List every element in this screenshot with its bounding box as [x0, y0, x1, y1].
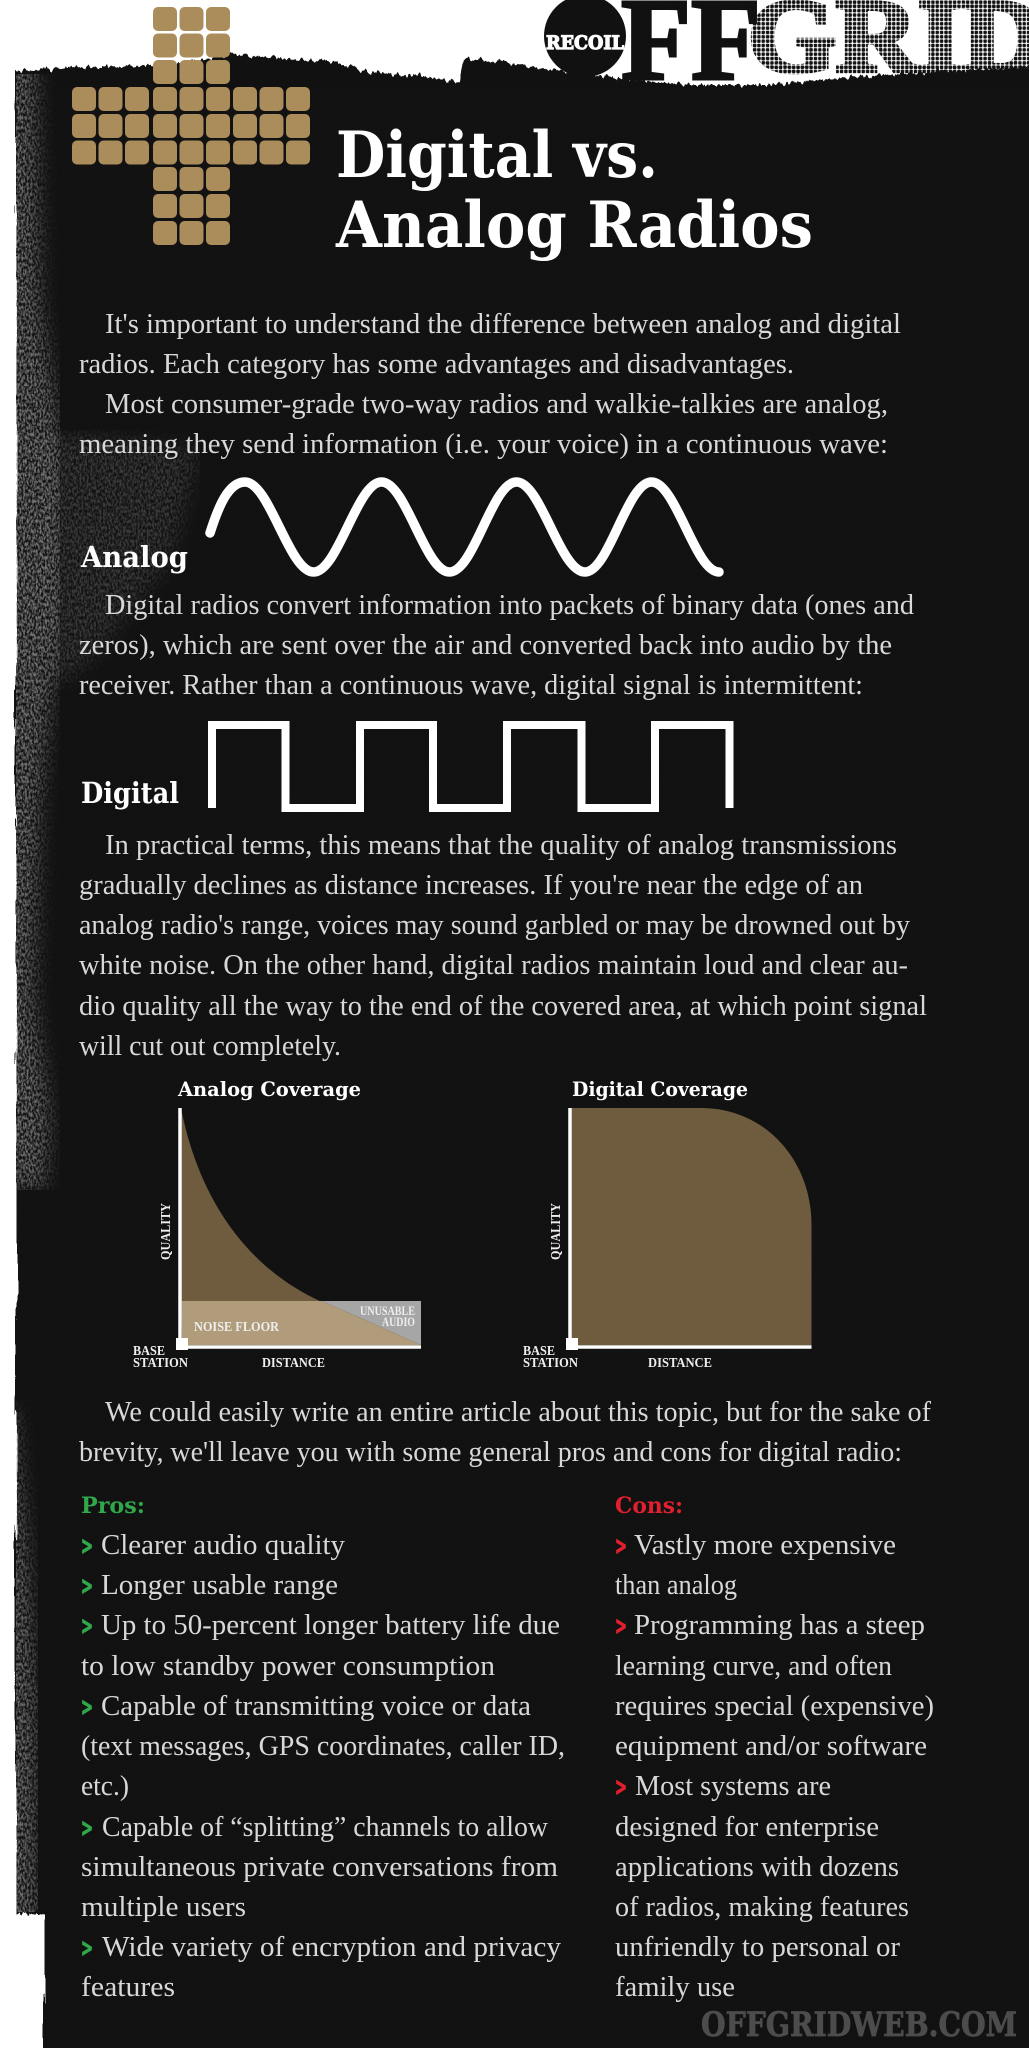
text block: practical terms: white noise. On the other hand, digital radios maintain loud and clear au-: [79, 950, 908, 981]
list text: [615, 1530, 934, 2003]
chart: digital square wave: [212, 725, 730, 808]
bullets: >: [81, 1692, 93, 1721]
list text: etc.): [81, 1771, 129, 1802]
text block: digital explanation: zeros), which are sent over the air and converted back into audio by the: [79, 630, 892, 661]
base station label: STATION: [133, 1356, 188, 1371]
logo circle with Recoil wordmark: RECOIL: [546, 32, 624, 54]
unusable audio label: AUDIO: [382, 1314, 415, 1329]
label: Analog: Analog: [80, 540, 188, 574]
title: Analog Radios: [335, 188, 813, 263]
list text: equipment and/or software: [615, 1731, 927, 1762]
bullets: >: [615, 1611, 627, 1640]
title: [335, 118, 813, 263]
unusable audio label: [360, 1303, 415, 1329]
icon: gold plus made of rounded tiles: [72, 7, 310, 245]
list text: Up to 50-percent longer battery life due: [101, 1610, 560, 1641]
text block: digital explanation: [79, 590, 914, 701]
text block: practical terms: gradually declines as distance increases. If you're near the edge of an: [79, 870, 863, 901]
unusable audio region: [322, 1301, 421, 1345]
text block: introduction: Most consumer-grade two-way radios and walkie-talkies are analog,: [105, 389, 888, 420]
grunge: faint patch behind analog section: [40, 430, 200, 690]
label: Digital: Digital: [81, 776, 179, 810]
text block: introduction: It's important to understand the difference between analog and digital: [105, 309, 901, 340]
title: Digital vs.: [336, 118, 658, 193]
base station marker: [566, 1338, 578, 1350]
unusable audio label: UNUSABLE: [360, 1303, 415, 1318]
logo: Recoil OffGrid masthead: [544, 0, 1029, 105]
bullets: >: [615, 1772, 627, 1801]
text block: practical terms: In practical terms, this means that the quality of analog transmissions: [105, 830, 897, 861]
list text: of radios, making features: [615, 1892, 909, 1923]
list text: Vastly more expensive: [634, 1530, 896, 1561]
list text: features: [81, 1972, 175, 2003]
bullets: >: [81, 1571, 93, 1600]
text block: introduction: radios. Each category has some advantages and disadvantages.: [79, 349, 794, 380]
list text: designed for enterprise: [615, 1812, 879, 1843]
analog signal area: [181, 1108, 322, 1345]
list text: Longer usable range: [101, 1570, 338, 1601]
list text: multiple users: [81, 1892, 246, 1923]
panel: cons: [615, 1493, 934, 2003]
chart heading: Digital Coverage: [572, 1077, 748, 1101]
text block: transition to pros and cons: brevity, we'll leave you with some general pros and cons for digital radio:: [79, 1437, 902, 1468]
chart heading: Analog Coverage: [177, 1077, 361, 1101]
list text: Wide variety of encryption and privacy: [102, 1932, 561, 1963]
text block: transition to pros and cons: [79, 1397, 932, 1468]
axis label quality: QUALITY: [159, 1203, 174, 1260]
panel: pros: [81, 1493, 565, 2003]
axis label distance: DISTANCE: [262, 1356, 325, 1371]
list text: Programming has a steep: [634, 1610, 925, 1641]
text block: digital explanation: receiver. Rather than a continuous wave, digital signal is intermittent:: [79, 670, 863, 701]
base station label: [133, 1344, 188, 1371]
bullets: >: [81, 1813, 93, 1842]
chart: analog sine wave: [210, 482, 719, 572]
bullets: [81, 1531, 93, 1962]
list text: Capable of transmitting voice or data: [101, 1691, 532, 1722]
list text: [81, 1530, 565, 2003]
axes: [570, 1108, 812, 1347]
list text: learning curve, and often: [615, 1651, 892, 1682]
axes: [180, 1108, 421, 1347]
base station marker: [176, 1338, 188, 1350]
text block: practical terms: dio quality all the way to the end of the covered area, at which point signal: [79, 991, 927, 1022]
base station label: STATION: [523, 1356, 578, 1371]
logo circle with Recoil wordmark: [544, 0, 626, 77]
list text: Clearer audio quality: [101, 1530, 345, 1561]
list text: simultaneous private conversations from: [81, 1852, 558, 1883]
base station label: [523, 1344, 578, 1371]
list text: unfriendly to personal or: [615, 1932, 901, 1963]
chart: analog coverage: [133, 1077, 421, 1371]
bullets: >: [81, 1531, 93, 1560]
bullets: [615, 1531, 627, 1801]
noise floor label: NOISE FLOOR: [194, 1320, 280, 1335]
text block: transition to pros and cons: We could easily write an entire article about this topic, but for the sake of: [105, 1397, 932, 1428]
bullets: >: [615, 1531, 627, 1560]
text block: practical terms: will cut out completely.: [79, 1031, 341, 1062]
noise floor region: [182, 1301, 421, 1345]
grunge: worn lower left edge: [16, 1400, 38, 1912]
list text: than analog: [615, 1570, 737, 1601]
list text: Capable of “splitting” channels to allow: [102, 1812, 549, 1843]
bullets: >: [81, 1611, 93, 1640]
heading: cons: Cons:: [615, 1493, 683, 1519]
text block: introduction: meaning they send information (i.e. your voice) in a continuous wave:: [79, 429, 888, 460]
text block: practical terms: analog radio's range, voices may sound garbled or may be drowned out by: [79, 910, 910, 941]
list text: family use: [615, 1972, 735, 2003]
list text: requires special (expensive): [615, 1691, 934, 1722]
chart: digital coverage: [523, 1077, 812, 1371]
digital signal area: [571, 1108, 812, 1345]
text block: digital explanation: Digital radios convert information into packets of binary data (ones and: [105, 590, 914, 621]
text block: introduction: [79, 309, 901, 460]
base station label: BASE: [133, 1344, 165, 1359]
list text: applications with dozens: [615, 1852, 899, 1883]
text block: practical terms: [79, 830, 927, 1062]
list text: (text messages, GPS coordinates, caller ID,: [81, 1731, 565, 1762]
heading: pros: Pros:: [81, 1493, 145, 1519]
axis label distance: DISTANCE: [648, 1356, 712, 1371]
grunge: worn left edge: [16, 74, 60, 1190]
list text: to low standby power consumption: [81, 1651, 495, 1682]
list text: Most systems are: [635, 1771, 831, 1802]
base station label: BASE: [523, 1344, 555, 1359]
bullets: >: [81, 1933, 93, 1962]
axis label quality: QUALITY: [549, 1203, 564, 1260]
